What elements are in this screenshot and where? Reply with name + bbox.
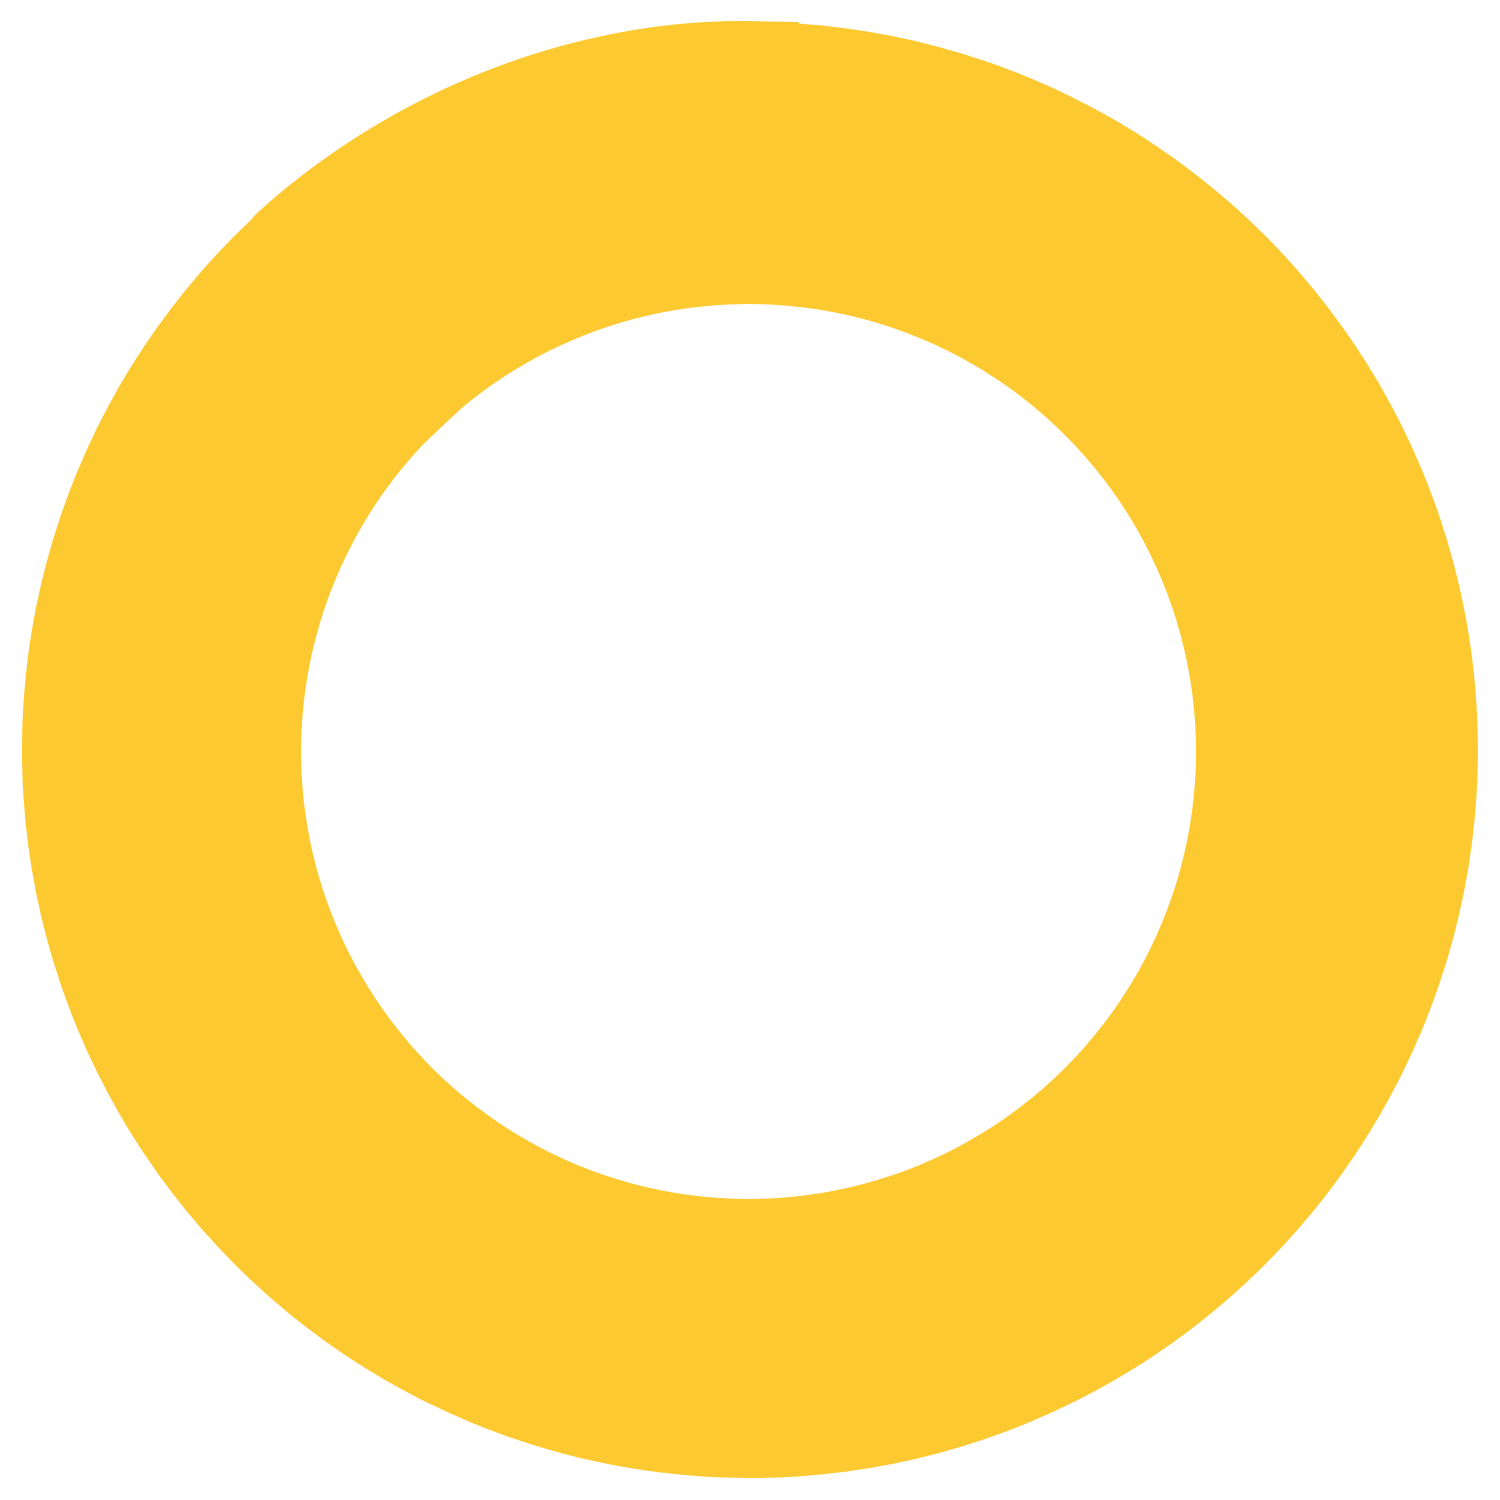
top-left overlapping segment — [247, 21, 800, 452]
